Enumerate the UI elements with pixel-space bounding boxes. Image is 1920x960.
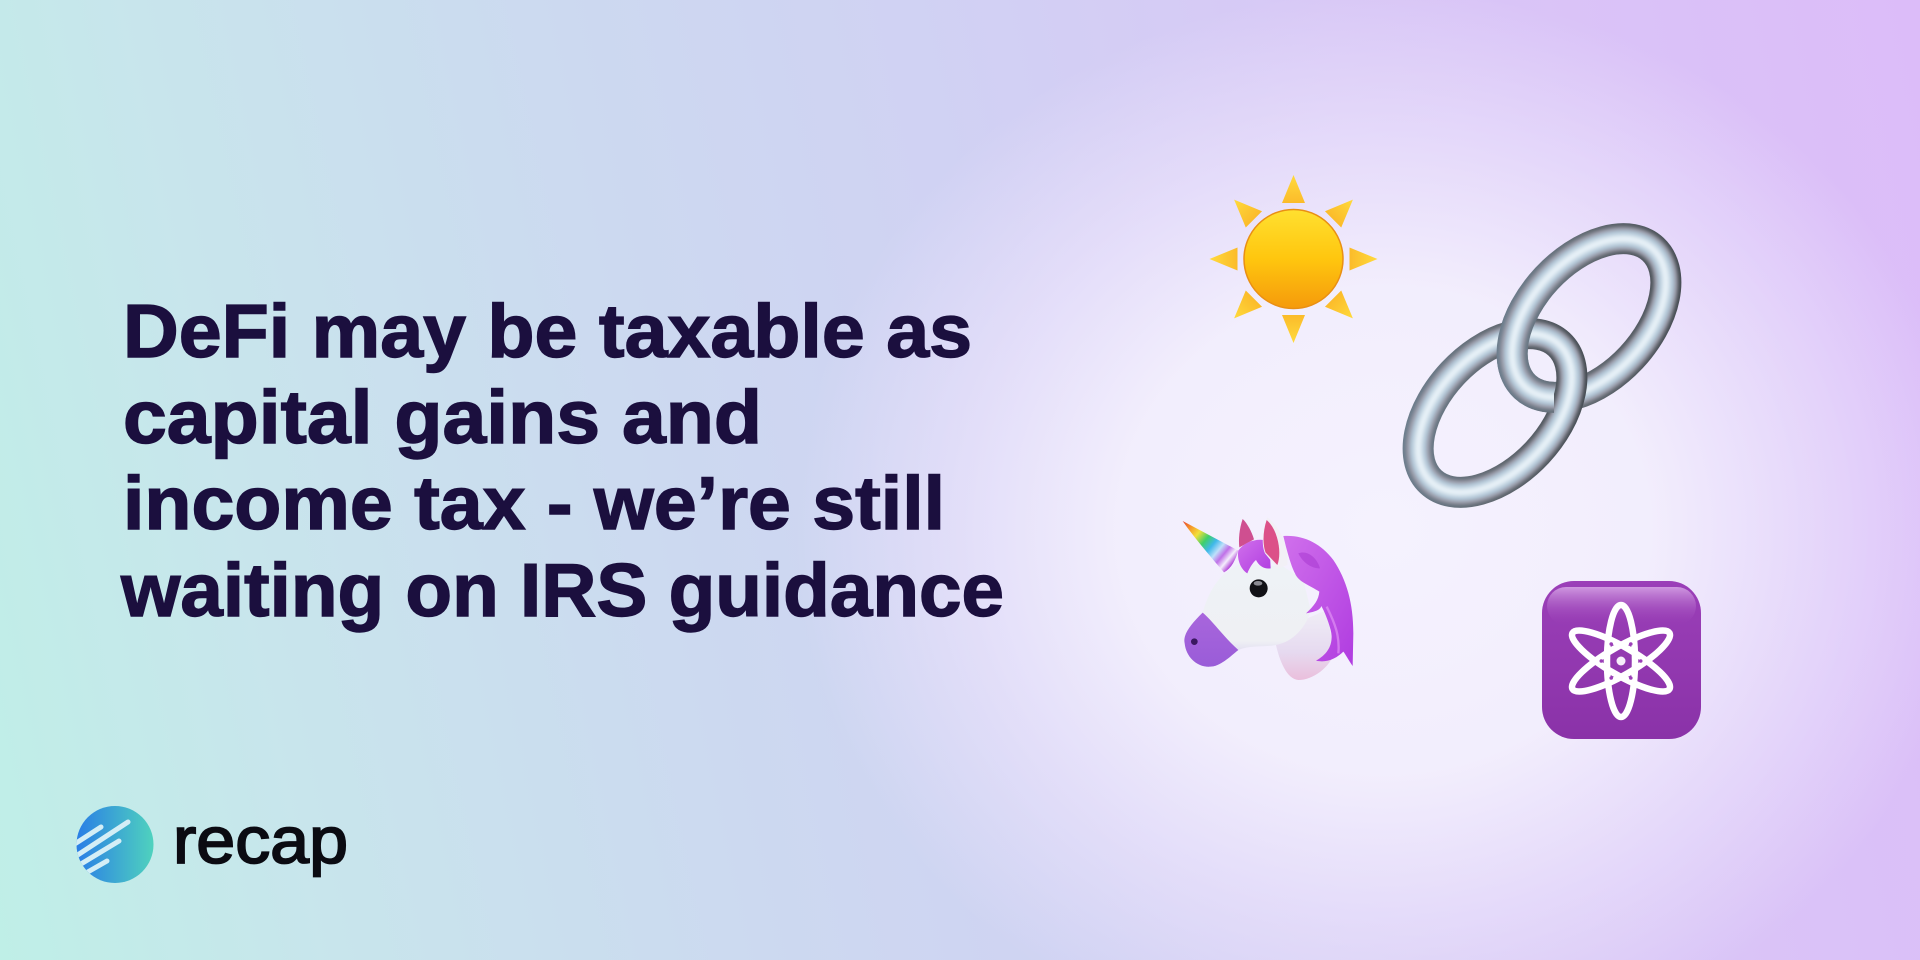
logo mark xyxy=(70,806,154,883)
front ear xyxy=(1263,517,1287,569)
mane: main xyxy=(1283,536,1353,666)
title: income tax - we’re still xyxy=(123,461,945,545)
title: waiting on IRS guidance xyxy=(120,548,1004,632)
neck xyxy=(1276,610,1334,680)
logo: recap xyxy=(70,803,348,883)
icon: chain links xyxy=(1402,223,1682,508)
title xyxy=(120,289,1004,632)
icon: unicorn xyxy=(1183,517,1353,680)
icon: atom symbol button xyxy=(1542,581,1701,739)
horn xyxy=(1183,521,1238,572)
logo wordmark: recap xyxy=(173,803,348,877)
eye xyxy=(1250,579,1268,597)
title: capital gains and xyxy=(123,375,762,459)
icon: sun xyxy=(1210,175,1378,343)
mane: forelock xyxy=(1238,540,1271,573)
head xyxy=(1184,563,1311,667)
back ear xyxy=(1239,519,1254,547)
nostril xyxy=(1191,638,1198,645)
artwork canvas xyxy=(76,175,1701,883)
title: DeFi may be taxable as xyxy=(123,289,972,373)
muzzle xyxy=(1184,613,1238,667)
